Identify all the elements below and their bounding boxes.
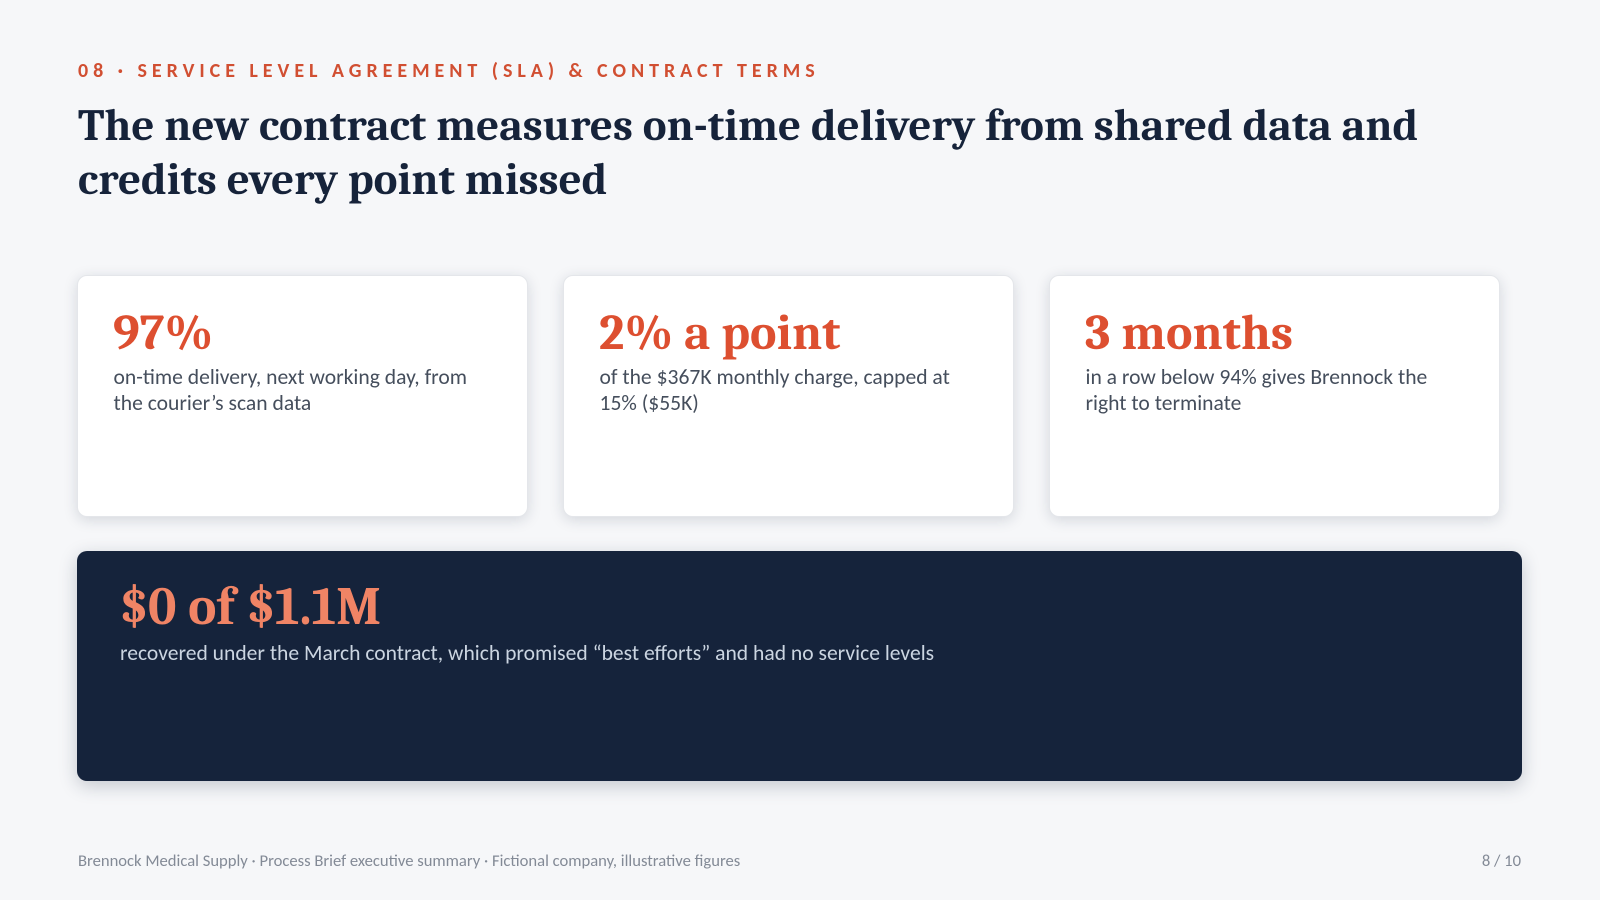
stat: 3 months: 3 months: [1085, 304, 1293, 362]
page number: 8 / 10: [1482, 851, 1521, 871]
title: The new contract measures on-time delivery from shared data and: [78, 101, 1418, 152]
description: on-time delivery: [114, 362, 467, 416]
panel: 97% on-time delivery: [77, 275, 528, 516]
stat: 97%: 97%: [113, 304, 213, 362]
description: termination right: [1086, 362, 1427, 416]
panel: 3 months: [1049, 275, 1500, 516]
description: monthly charge credit: [600, 362, 950, 416]
description: March contract: recovered under the March contract, which promised “best efforts” and had no service levels: [120, 639, 934, 666]
title: credits every point missed: [78, 155, 607, 206]
description: termination right: right to terminate: [1086, 388, 1241, 416]
footer source note: Brennock Medical Supply · Process Brief executive summary · Fictional company, illustrative figures: [78, 851, 740, 871]
panel: March contract recovery: [77, 551, 1522, 781]
title: [78, 101, 1418, 206]
description: on-time delivery: on-time delivery, next working day, from: [114, 362, 467, 390]
description: on-time delivery: the courier’s scan data: [114, 388, 311, 416]
stat: $0 of $1.1M: $0 of $1.1M: [119, 577, 381, 638]
stat: 2% a point: 2% a point: [599, 304, 840, 362]
description: termination right: in a row below 94% gives Brennock the: [1086, 362, 1427, 390]
description: monthly charge credit: 15% ($55K): [600, 388, 699, 416]
panel: 2% a point: [563, 275, 1014, 516]
description: monthly charge credit: of the $367K monthly charge, capped at: [600, 362, 950, 390]
eyebrow label: 08 · SERVICE LEVEL AGREEMENT (SLA) & CONTRACT TERMS: [78, 59, 820, 83]
